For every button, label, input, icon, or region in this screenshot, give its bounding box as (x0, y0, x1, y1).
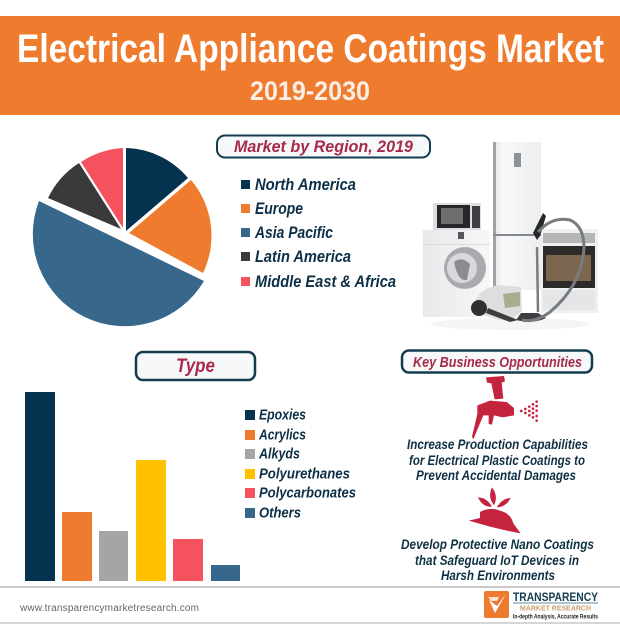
vacuum cleaner (473, 285, 522, 321)
text: opportunity two: that Safeguard IoT Devices in (415, 552, 579, 568)
legend: type: Polyurethanes (259, 466, 350, 482)
legend: regions: Middle East & Africa (255, 272, 396, 291)
subtitle years: 2019-2030 (250, 76, 370, 106)
oven (541, 229, 598, 313)
heading: type: Type (176, 356, 215, 377)
text: opportunity two (401, 536, 594, 583)
legend: type: Polycarbonates (259, 486, 356, 502)
washing machine (423, 230, 490, 317)
legend: type: Alkyds (258, 446, 300, 462)
text: opportunity two: Harsh Environments (441, 567, 555, 583)
legend: regions: Latin America (255, 247, 351, 266)
heading: market by region: Market by Region, 2019 (234, 138, 414, 156)
microwave (433, 203, 481, 230)
pie chart: market by region (33, 148, 211, 326)
text: opportunity one: Prevent Accidental Damages (416, 467, 576, 483)
logo: transparency market research: MARKET RESEARCH (520, 604, 591, 612)
image: household appliances (423, 142, 598, 330)
legend: type: Epoxies (259, 408, 306, 424)
legend: type: Acrylics (258, 428, 306, 444)
website url: www.transparencymarketresearch.com (19, 603, 199, 614)
footer rules (0, 586, 620, 624)
text: opportunity one: for Electrical Plastic Coatings to (409, 452, 585, 468)
bar chart: type (25, 392, 240, 581)
legend: regions: Europe (255, 199, 303, 218)
header banner (0, 16, 620, 115)
icon: spray gun (472, 376, 538, 439)
legend: regions (241, 175, 396, 291)
fridge (493, 142, 541, 290)
legend: type: Others (259, 506, 301, 522)
icon: hand holding plant (469, 487, 521, 533)
logo: transparency market research (484, 590, 599, 620)
logo mark (484, 591, 509, 618)
text: opportunity one: Increase Production Capabilities (407, 436, 588, 452)
legend: regions: North America (255, 175, 356, 194)
legend: type (245, 408, 356, 522)
logo: transparency market research: TRANSPARENCY (513, 590, 598, 604)
text: opportunity one (407, 436, 588, 483)
heading: key business opportunities: Key Business Opportunities (413, 354, 582, 371)
legend: regions: Asia Pacific (254, 223, 333, 242)
logo: transparency market research: In-depth Analysis, Accurate Results (513, 614, 599, 620)
heading: key business opportunities (402, 350, 592, 372)
heading: type (136, 352, 255, 380)
